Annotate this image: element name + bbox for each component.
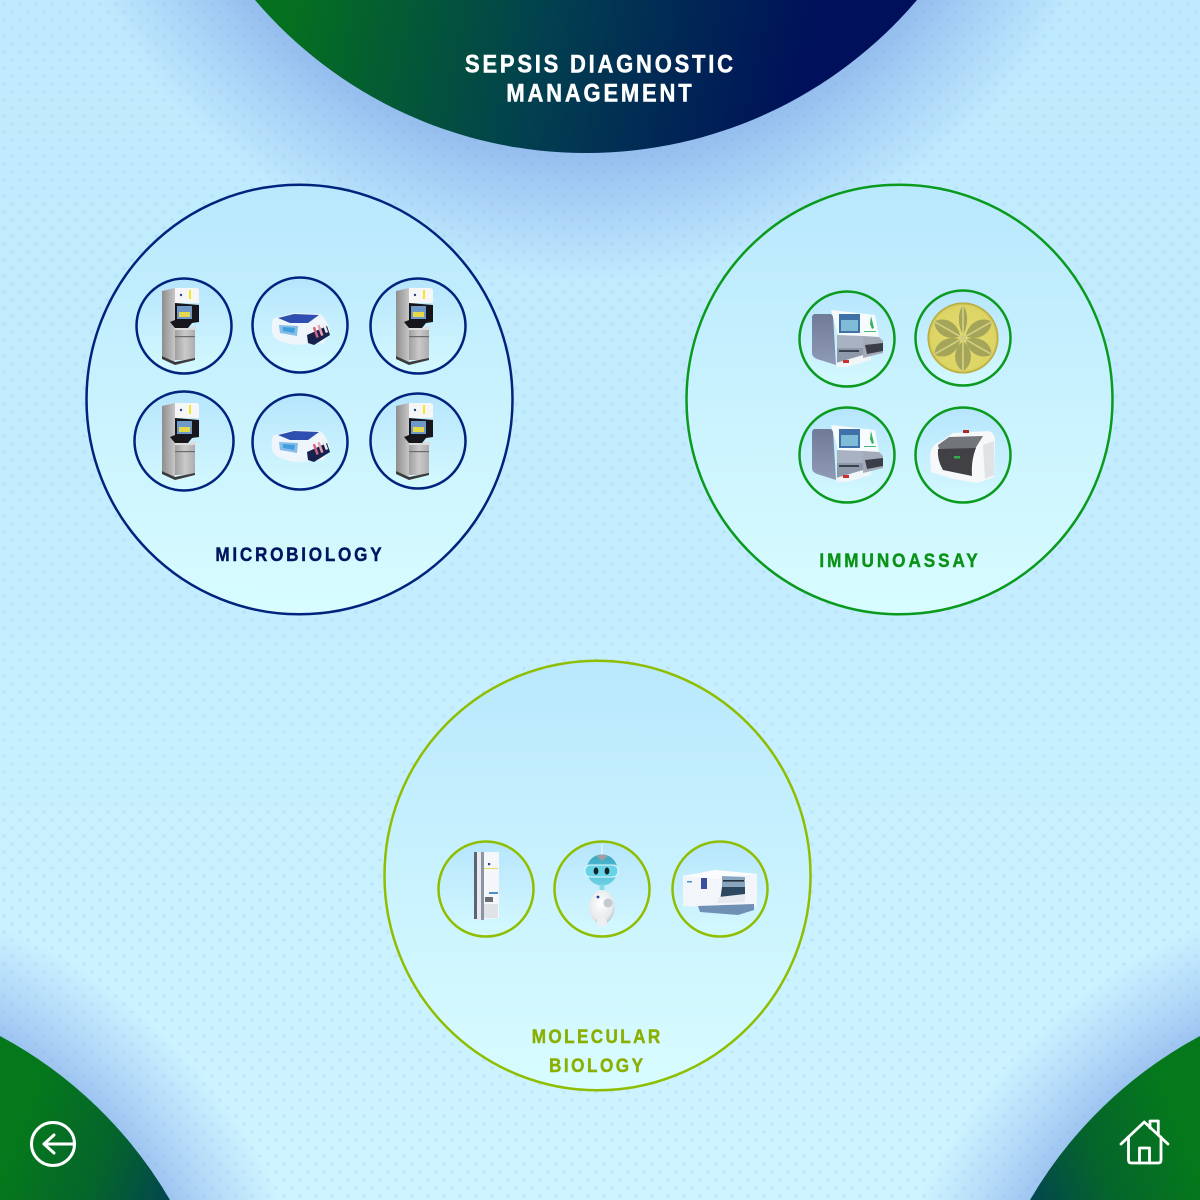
device: kiosk analyzer 2 xyxy=(370,278,466,374)
title banner xyxy=(255,0,917,153)
corner: home button xyxy=(1030,1036,1200,1200)
device: tower sequencer xyxy=(438,842,534,936)
device: immunoassay analyzer 1 xyxy=(800,292,894,386)
panel: molecular biology xyxy=(384,661,810,1090)
title: SEPSIS DIAGNOSTIC xyxy=(465,50,733,78)
device: kiosk analyzer 4 xyxy=(370,394,466,488)
label: microbiology: MICROBIOLOGY xyxy=(215,543,382,565)
device: kiosk analyzer 1 xyxy=(136,278,232,374)
label: molecular biology: BIOLOGY xyxy=(549,1054,643,1076)
label: molecular biology: MOLECULAR xyxy=(532,1025,660,1047)
title: MANAGEMENT xyxy=(506,79,692,107)
device: incubator 1 xyxy=(252,278,348,372)
device: desktop instrument xyxy=(672,842,768,936)
icon: home xyxy=(1121,1121,1168,1163)
panel: immunoassay xyxy=(686,185,1112,614)
device: benchtop reader xyxy=(916,408,1010,502)
label: immunoassay: IMMUNOASSAY xyxy=(819,549,978,571)
label: molecular biology xyxy=(532,1025,660,1076)
icon: back arrow xyxy=(32,1122,74,1166)
device: kiosk analyzer 3 xyxy=(134,392,234,490)
title xyxy=(465,50,733,107)
panel: microbiology xyxy=(86,185,512,614)
device: robot mascot xyxy=(554,842,650,936)
corner: back button xyxy=(0,1036,170,1200)
device: reagent disc xyxy=(916,290,1010,386)
device: immunoassay analyzer 2 xyxy=(800,408,894,502)
device: incubator 2 xyxy=(252,394,348,490)
